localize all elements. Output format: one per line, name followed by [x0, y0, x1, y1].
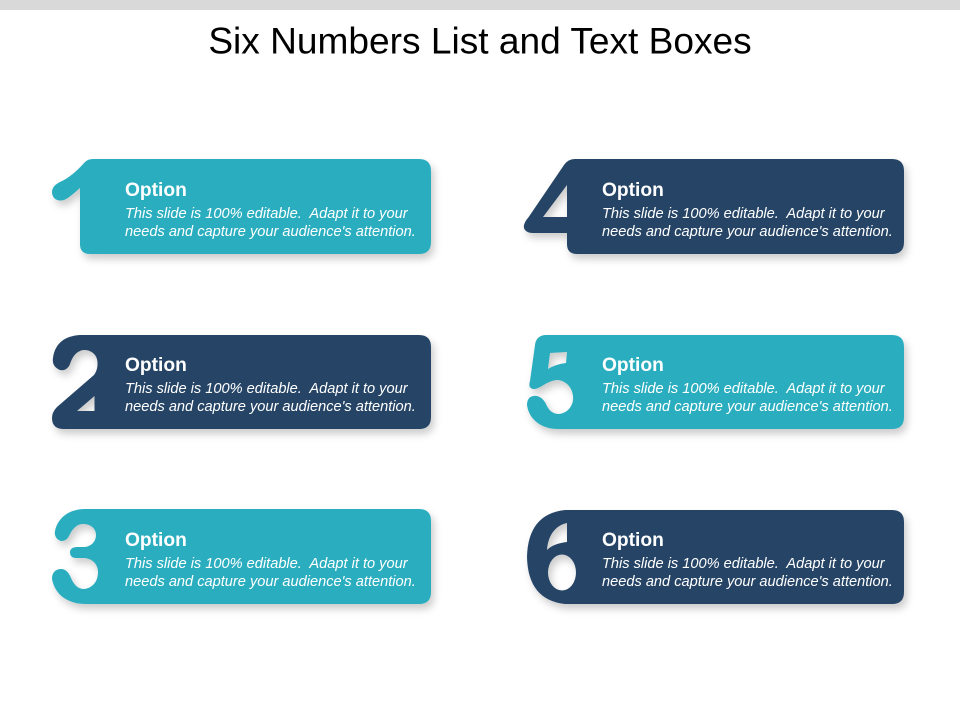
panel: option 4	[524, 159, 904, 254]
option 4 text: Option	[602, 180, 664, 201]
panel: option 5	[527, 335, 904, 429]
number 3 box shape	[52, 509, 431, 604]
option 2 text: needs and capture your audience's attention.	[125, 399, 416, 415]
option 5 text: needs and capture your audience's attention.	[602, 399, 893, 415]
option 5 text: This slide is 100% editable. Adapt it to your	[602, 381, 886, 397]
option 2 text: This slide is 100% editable. Adapt it to your	[125, 381, 409, 397]
option 3 text: Option	[125, 530, 187, 551]
option 1 text: needs and capture your audience's attention.	[125, 224, 416, 240]
option 1 text	[125, 180, 416, 240]
title: Six Numbers List and Text Boxes	[208, 20, 752, 62]
option 4 text: This slide is 100% editable. Adapt it to your	[602, 206, 886, 222]
option 6 text: Option	[602, 530, 664, 551]
option 1 text: This slide is 100% editable. Adapt it to your	[125, 206, 409, 222]
number 6 box shape	[527, 510, 904, 604]
option 3 text	[125, 530, 416, 590]
option 5 text: Option	[602, 355, 664, 376]
option 4 text	[602, 180, 893, 240]
option 3 text: This slide is 100% editable. Adapt it to your	[125, 556, 409, 572]
number 1 box shape	[52, 159, 431, 254]
option 4 text: needs and capture your audience's attention.	[602, 224, 893, 240]
panel: option 3	[52, 509, 431, 604]
panel: option 1	[52, 159, 431, 254]
option 2 text	[125, 355, 416, 415]
panel: option 6	[527, 510, 904, 604]
option 6 text: needs and capture your audience's attention.	[602, 574, 893, 590]
panel: option 2	[52, 335, 431, 429]
option 6 text	[602, 530, 893, 590]
top grey band	[0, 0, 960, 10]
option 1 text: Option	[125, 180, 187, 201]
option 3 text: needs and capture your audience's attention.	[125, 574, 416, 590]
number 2 box shape	[52, 335, 431, 429]
option 6 text: This slide is 100% editable. Adapt it to your	[602, 556, 886, 572]
number 5 box shape	[527, 335, 904, 429]
number 4 box shape	[524, 159, 904, 254]
option 5 text	[602, 355, 893, 415]
option 2 text: Option	[125, 355, 187, 376]
